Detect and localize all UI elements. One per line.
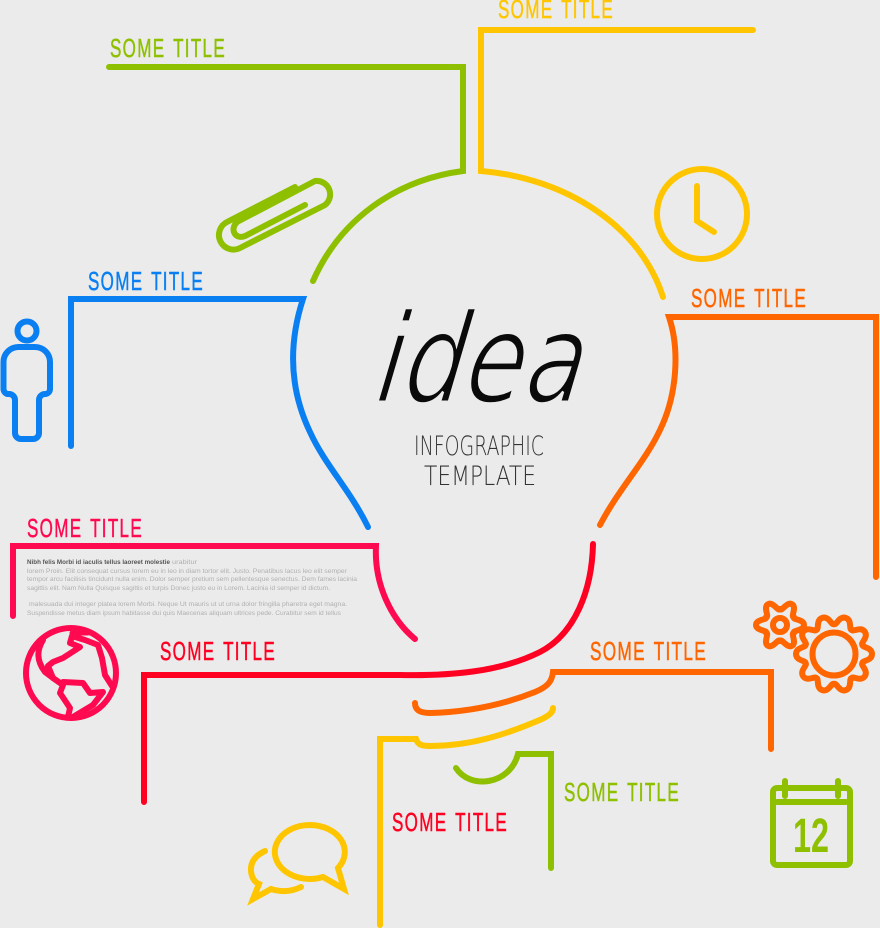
heading: red title beside yellow line: SOME TITLE [392,807,508,837]
icon: clock [657,169,747,259]
icon: calendar [773,781,850,865]
panel: orange right bulb segment [600,283,876,577]
panel: green bulb tip [456,754,680,868]
panel: red bulb base segment [144,544,593,802]
panel: yellow top bulb segment [481,0,753,297]
subtitle: infographic: INFOGRAPHIC [414,431,544,462]
heading: red title: SOME TITLE [160,636,276,666]
text block: body copy [27,559,357,617]
text block: body copy: Suspendisse metus diam ipsum habitasse dui quis Maecenas aliquam ultrices pede. Curabitur sem id tellus [27,610,342,617]
panel: yellow lower band [380,708,553,925]
panel: pink bulb segment with text [13,513,415,639]
heading: orange lower title: SOME TITLE [590,636,707,666]
panel: green top bulb segment [109,33,463,281]
panel: blue left bulb segment [71,266,368,527]
icon: chat bubbles [251,825,345,899]
title: idea: idea [370,288,598,432]
icon: paperclip [219,181,330,250]
text block: body copy: Nibh felis Morbi id iaculis tellus laoreet molestie [27,559,170,566]
text block: body copy: lorem Proin. Elit consequat cursus lorem eu in leo in diam tortor elit. Justo. Penatibus lacus leo elit semper [27,568,348,575]
panel: orange lower band [415,636,771,749]
icon: gears [756,600,872,693]
text block: body copy: sagittis elit. Nam Nulla Quisque sagittis et turpis Donec justo eu in Lorem. Lacinia id semper id dictum. [27,585,330,592]
text block: body copy: urabitur [172,559,198,566]
heading: green top title: SOME TITLE [110,33,226,63]
icon: globe [26,628,116,718]
heading: orange right title: SOME TITLE [691,283,807,313]
icon: calendar: 12 [793,810,829,863]
heading: pink title: SOME TITLE [27,513,143,543]
text block: body copy: malesuada dui integer platea lorem Morbi. Neque Ut mauris ut ut urna dolor fringilla pharetra eget magna. [29,601,347,608]
heading: green lower title: SOME TITLE [564,777,680,807]
icon: person [3,322,50,439]
text block: body copy: tempor arcu facilisis tincidunt nulla enim. Dolor semper pretium sem pellentesque senectus. Dem fames lacinia [27,576,357,583]
subtitle: template: TEMPLATE [424,461,536,492]
heading: blue title: SOME TITLE [88,266,204,296]
